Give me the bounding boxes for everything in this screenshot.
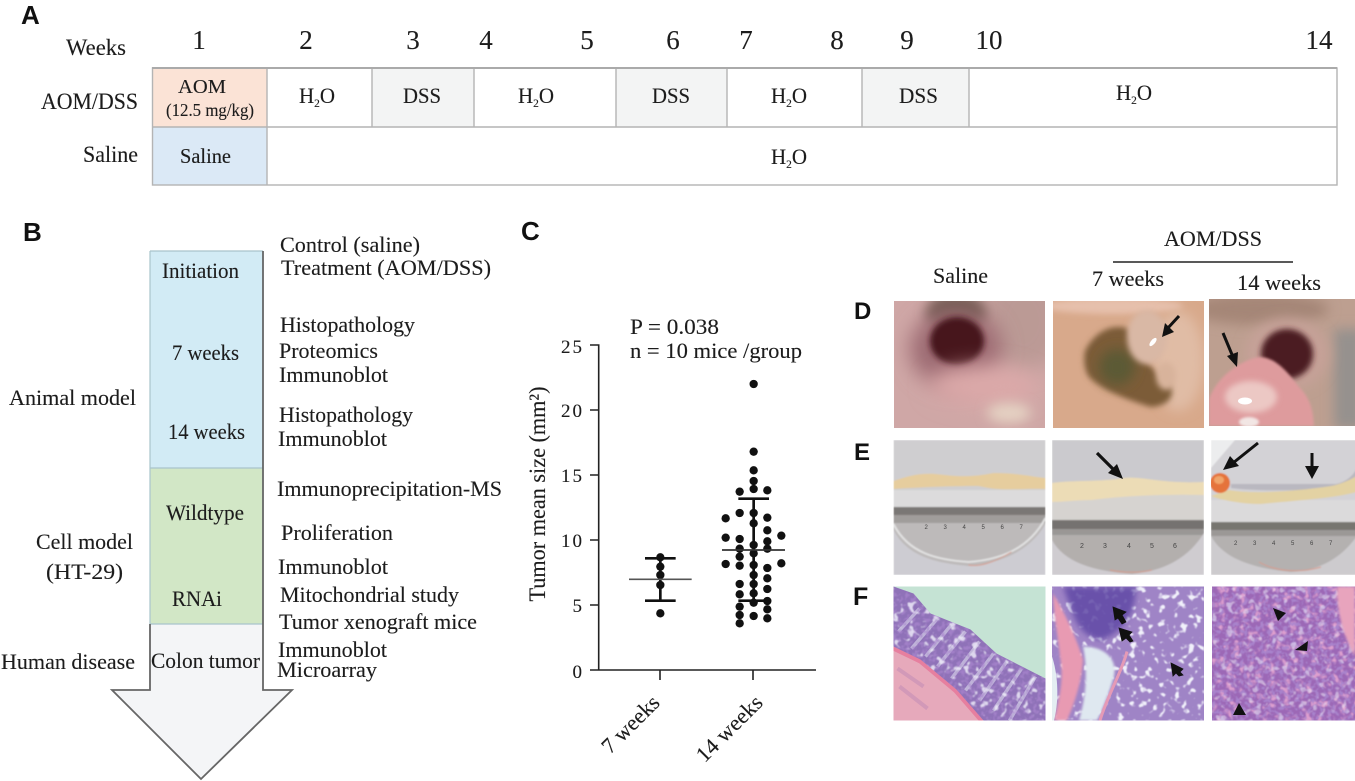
right assay labels: Treatment (AOM/DSS) [281, 255, 491, 280]
photo: 14 weeks colon: 3 [1253, 541, 1257, 547]
photo: saline endoscopy [894, 301, 1045, 428]
row label AOM/DSS: AOM/DSS [41, 89, 138, 114]
arrow diagram: 7 weeks [172, 340, 239, 365]
week axis labels: 2 [299, 25, 313, 55]
arrow: 14 weeks polyp [1223, 333, 1238, 367]
photo: saline colon: 2 [924, 525, 928, 531]
arrows: 7 weeks histology [1113, 607, 1183, 676]
14 weeks group [721, 380, 785, 627]
timeline table: 2 [786, 96, 792, 110]
photo: saline colon: 4 [962, 525, 966, 531]
right assay labels [277, 232, 502, 682]
panel E: resected colon images [854, 439, 1355, 575]
timeline table: (12.5 mg/kg) [166, 100, 254, 120]
y axis tick labels: 20 [561, 401, 582, 422]
arrow diagram: RNAi [172, 586, 222, 611]
week axis labels: 1 [192, 25, 206, 55]
timeline table: O [792, 144, 807, 169]
right assay labels: Proteomics [279, 338, 378, 363]
week axis labels: Weeks [66, 35, 126, 60]
right assay labels: Proliferation [281, 520, 393, 545]
panel F: histology images [853, 583, 1355, 720]
photo: 14 weeks colon [1210, 440, 1355, 575]
arrow: 7 weeks polyp [1162, 316, 1179, 337]
timeline table: 2 [533, 96, 539, 110]
photo: 14 weeks histology [1212, 586, 1355, 720]
arrow: 7 weeks colon [1097, 453, 1123, 479]
week axis labels: 4 [479, 25, 493, 55]
timeline table: Saline [180, 144, 231, 168]
right assay labels: Immunoprecipitation-MS [277, 476, 502, 501]
right assay labels: Histopathology [280, 312, 416, 337]
arrow diagram: 14 weeks [168, 419, 245, 444]
photo: 14 weeks colon: 7 [1329, 541, 1333, 547]
timeline table: 2 [1131, 93, 1137, 107]
photo: 14 weeks colon: 6 [1310, 541, 1314, 547]
arrow: 14 weeks colon right [1305, 453, 1319, 479]
photo: 14 weeks endoscopy [1209, 299, 1355, 426]
week axis labels: 6 [666, 25, 680, 55]
timeline table: 2 [786, 157, 792, 171]
timeline table: H [771, 144, 787, 169]
left model labels: Animal model [9, 385, 136, 410]
timeline table: DSS [899, 83, 938, 108]
arrowheads: 14 weeks histology [1233, 608, 1308, 715]
photo: 7 weeks colon: 5 [1150, 543, 1154, 550]
photo: 7 weeks endoscopy [1043, 298, 1204, 428]
timeline table: O [320, 83, 335, 108]
panel A: treatment timeline [21, 0, 1337, 185]
panel D: endoscopy images [856, 299, 1355, 428]
timeline table: DSS [652, 83, 690, 108]
row label Saline: Saline [83, 142, 138, 167]
y axis tick labels: 5 [572, 596, 582, 617]
right assay labels: Immunoblot [278, 426, 388, 451]
panel letter B: B [23, 217, 42, 247]
photo: 7 weeks colon: 4 [1127, 543, 1131, 550]
photo: saline histology [894, 586, 1046, 720]
photo: 7 weeks colon [1052, 440, 1204, 575]
y axis tick labels: 10 [561, 531, 582, 552]
left model labels: Cell model [36, 529, 133, 554]
statistics note: P = 0.038 [630, 314, 719, 339]
photo: 7 weeks colon: 3 [1103, 543, 1107, 550]
7 weeks group [629, 553, 692, 617]
photo: 14 weeks colon: 4 [1272, 541, 1276, 547]
timeline table: O [539, 83, 554, 108]
week axis labels: 7 [739, 25, 753, 55]
column headings for photo panels [933, 226, 1321, 295]
photo: saline colon: 6 [1000, 525, 1004, 531]
week axis labels [66, 25, 1333, 60]
x axis labels: 14 weeks [690, 690, 768, 767]
panel C: tumor size scatter plot [521, 216, 816, 767]
timeline table: DSS [403, 83, 441, 108]
column headings for photo panels: 14 weeks [1237, 270, 1321, 295]
timeline table: O [1137, 80, 1152, 105]
panel letter C: C [521, 216, 540, 246]
left model labels: (HT-29) [46, 559, 123, 584]
column headings for photo panels: AOM/DSS [1164, 226, 1262, 251]
photo: saline colon: 7 [1020, 525, 1024, 531]
statistics note: n = 10 mice /group [630, 338, 802, 363]
timeline table: AOM [178, 76, 226, 98]
week axis labels: 3 [406, 25, 420, 55]
week axis labels: 14 [1306, 25, 1333, 55]
week axis labels: 9 [900, 25, 914, 55]
statistics note [630, 314, 802, 363]
panel B: study design arrow [1, 217, 502, 779]
panel letter D: D [854, 298, 871, 325]
timeline table: 2 [314, 96, 320, 110]
week axis labels: 5 [580, 25, 594, 55]
y axis tick labels: 15 [561, 466, 582, 487]
y axis tick labels: 25 [561, 337, 582, 358]
left model labels: Human disease [1, 649, 135, 674]
x axis labels [596, 690, 768, 767]
timeline table: O [792, 83, 807, 108]
axes [590, 345, 816, 680]
panel letter F: F [853, 583, 868, 611]
timeline table: H [299, 83, 315, 108]
arrow diagram: Initiation [162, 258, 239, 283]
arrow diagram: Colon tumor [151, 648, 260, 673]
timeline table: H [518, 83, 534, 108]
data points and error bars [629, 380, 785, 627]
timeline table: H [1116, 80, 1132, 105]
y axis tick labels [561, 337, 582, 683]
arrow diagram: Wildtype [166, 500, 244, 525]
arrow diagram [112, 251, 292, 779]
right assay labels: Microarray [277, 657, 378, 682]
week axis labels: 10 [976, 25, 1002, 55]
right assay labels: Immunoblot [278, 637, 388, 662]
column headings for photo panels: 7 weeks [1092, 266, 1164, 291]
week axis labels: 8 [830, 25, 844, 55]
photo: 7 weeks colon: 6 [1173, 543, 1177, 550]
panel letter A: A [21, 0, 40, 30]
right assay labels: Mitochondrial study [280, 582, 460, 607]
x axis labels: 7 weeks [596, 690, 665, 758]
panel letter E: E [854, 439, 870, 466]
photo: 14 weeks colon: 5 [1291, 541, 1295, 547]
right assay labels: Histopathology [279, 402, 414, 427]
column headings for photo panels: Saline [933, 263, 988, 288]
y axis title: Tumor mean size (mm²) [525, 386, 550, 602]
arrow: 14 weeks colon left [1223, 443, 1258, 470]
photo: saline colon: 3 [944, 525, 948, 531]
right assay labels: Tumor xenograft mice [279, 609, 477, 634]
right assay labels: Immunoblot [278, 554, 389, 579]
photo: 7 weeks colon: 2 [1080, 543, 1084, 550]
photo: 7 weeks histology [1052, 586, 1204, 720]
timeline table: H [771, 83, 787, 108]
photo: 14 weeks colon: 2 [1234, 541, 1238, 547]
timeline table [152, 68, 1337, 185]
photo: saline colon [894, 440, 1046, 575]
y axis tick labels: 0 [572, 662, 582, 683]
photo: saline colon: 5 [982, 525, 986, 531]
right assay labels: Immunoblot [279, 362, 389, 387]
right assay labels: Control (saline) [280, 232, 420, 257]
left model labels [1, 385, 136, 674]
